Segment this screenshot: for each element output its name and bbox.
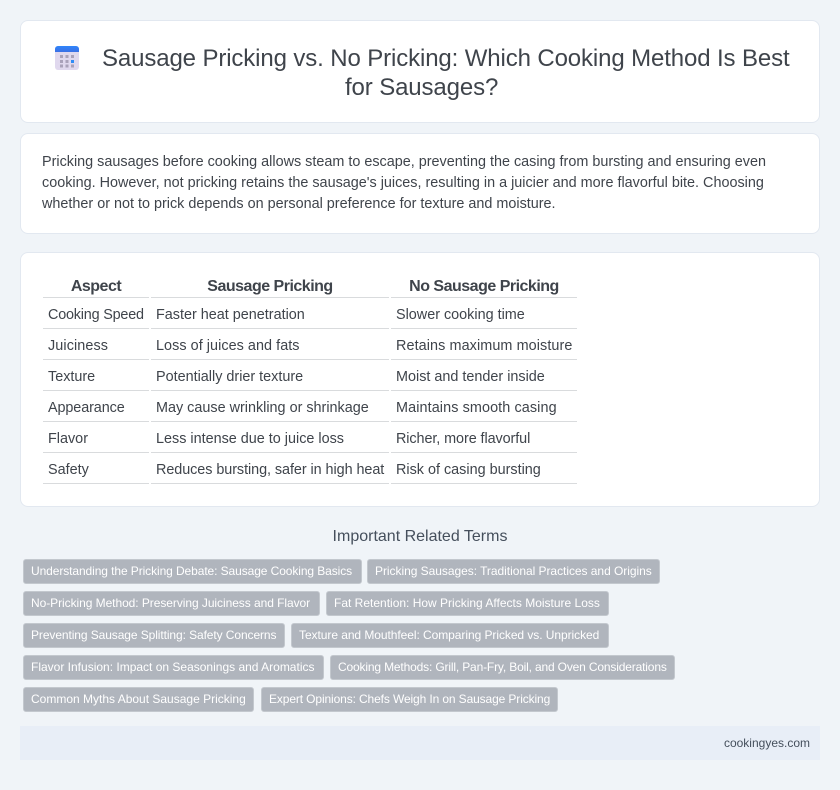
related terms tags: Common Myths About Sausage Pricking [31,692,246,706]
panel: comparison table card [20,252,820,507]
title: Sausage Pricking vs. No Pricking: Which Cooking Method Is Best [102,45,790,72]
footer bar [20,726,820,760]
comparison table: Maintains smooth casing [396,400,557,416]
comparison table: Flavor [48,431,88,447]
intro text: cooking. However, not pricking retains the sausage's juices, resulting in a juicier and more flavorful bite. Choosing [42,175,764,191]
related terms tags: Cooking Methods: Grill, Pan-Fry, Boil, and Oven Considerations [338,660,667,674]
comparison table: Safety [48,462,89,478]
related terms tags [23,559,675,712]
related terms tags: Flavor Infusion: Impact on Seasonings and Aromatics [31,660,314,674]
title: for Sausages? [345,74,498,101]
related terms tags: Expert Opinions: Chefs Weigh In on Sausage Pricking [269,692,550,706]
comparison table: Risk of casing bursting [396,462,541,478]
panel: intro text card [20,133,820,234]
comparison table: Juiciness [48,338,108,354]
comparison table: Texture [48,369,95,385]
comparison table: Aspect [71,278,121,295]
comparison table: Moist and tender inside [396,369,545,385]
footer source text: cookingyes.com [724,736,810,750]
intro text: Pricking sausages before cooking allows steam to escape, preventing the casing from bursting and ensuring even [42,154,766,170]
related terms tags: Understanding the Pricking Debate: Sausage Cooking Basics [31,564,352,578]
comparison table: Slower cooking time [396,307,525,323]
comparison table [43,278,577,484]
comparison table: Less intense due to juice loss [156,431,344,447]
related terms tags: Fat Retention: How Pricking Affects Moisture Loss [334,596,600,610]
related terms tags: Preventing Sausage Splitting: Safety Concerns [31,628,276,642]
comparison table: Retains maximum moisture [396,338,572,354]
comparison table: Reduces bursting, safer in high heat [156,462,384,478]
intro text [42,154,766,212]
comparison table: Sausage Pricking [207,278,333,295]
related terms tags: No-Pricking Method: Preserving Juiciness and Flavor [31,596,310,610]
icon: calendar [55,46,79,70]
title [102,45,790,101]
intro text: whether or not to prick depends on personal preference for texture and moisture. [42,196,556,212]
comparison table: Richer, more flavorful [396,431,530,447]
related terms tags: Pricking Sausages: Traditional Practices and Origins [375,564,652,578]
comparison table: Loss of juices and fats [156,338,300,354]
panel: title card [20,20,820,123]
comparison table: Faster heat penetration [156,307,305,323]
comparison table: May cause wrinkling or shrinkage [156,400,369,416]
heading: related terms: Important Related Terms [333,528,507,545]
comparison table: Potentially drier texture [156,369,303,385]
comparison table: Cooking Speed [48,307,144,323]
comparison table: No Sausage Pricking [409,278,559,295]
related terms tags: Texture and Mouthfeel: Comparing Pricked vs. Unpricked [299,628,599,642]
comparison table: Appearance [48,400,125,416]
